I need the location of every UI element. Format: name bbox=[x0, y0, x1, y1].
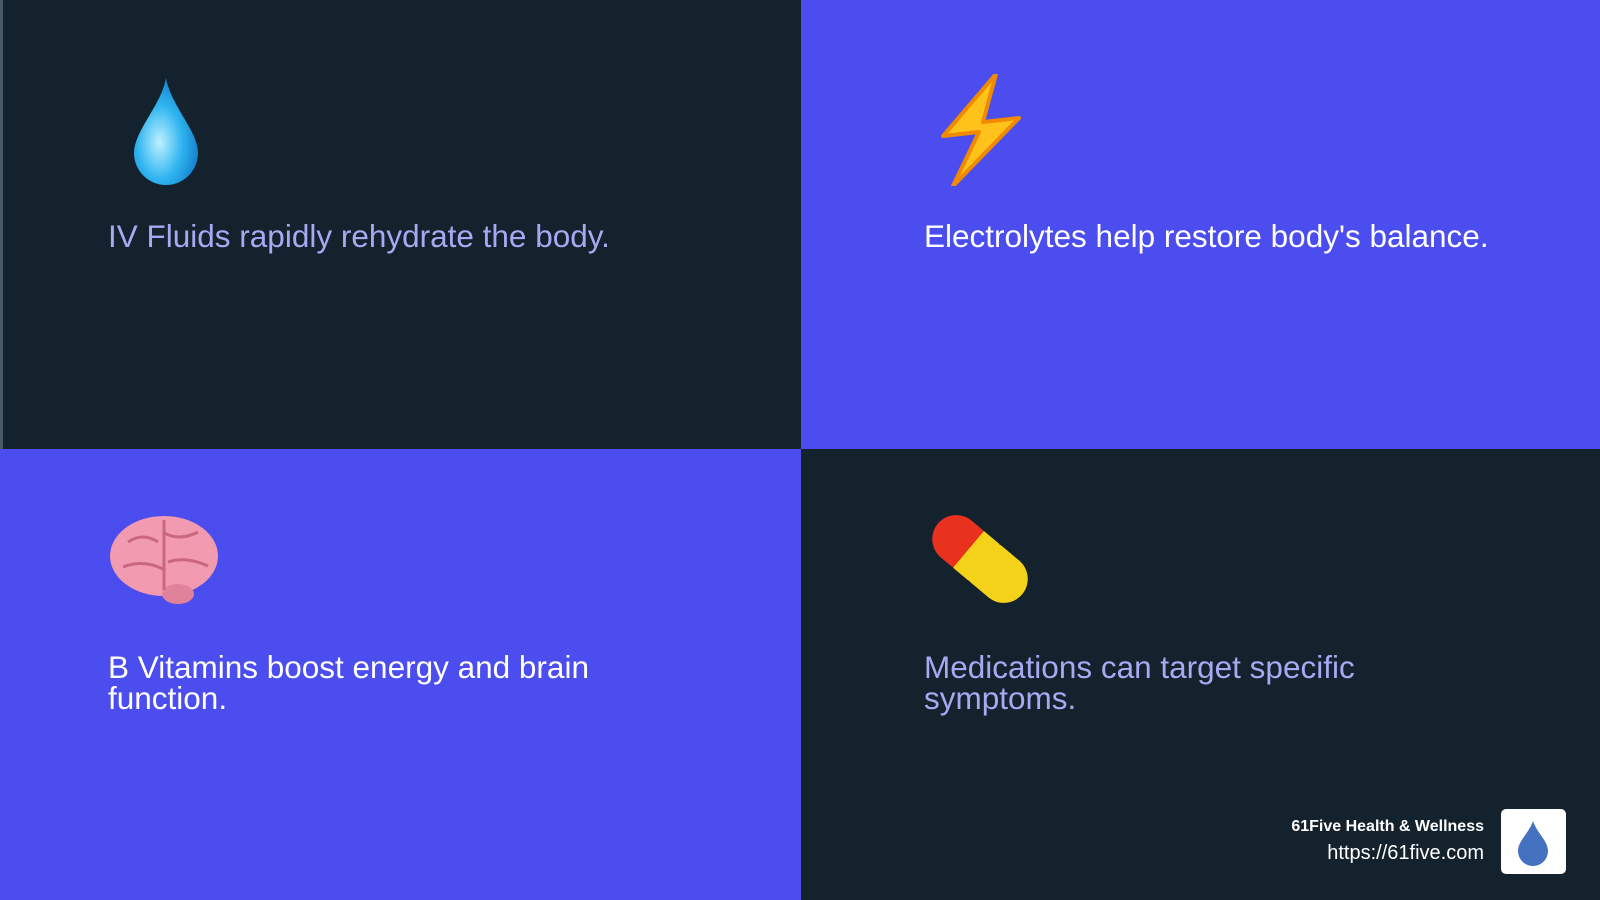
icon: water drop bbox=[134, 78, 198, 185]
panel: medications bbox=[801, 449, 1600, 900]
brand text: 61Five Health & Wellness bbox=[1291, 818, 1484, 835]
text: B vitamins: B Vitamins boost energy and brain function. bbox=[108, 649, 589, 716]
panel: IV fluids bbox=[0, 0, 801, 449]
icon: brain bbox=[110, 516, 218, 604]
text: IV fluids: IV Fluids rapidly rehydrate the body. bbox=[108, 218, 610, 254]
panel: B vitamins bbox=[0, 449, 801, 900]
text: electrolytes: Electrolytes help restore body's balance. bbox=[924, 218, 1489, 254]
icon: pill bbox=[932, 515, 1028, 603]
icon: lightning bbox=[941, 74, 1021, 186]
panel: electrolytes bbox=[801, 0, 1600, 449]
logo bbox=[1501, 809, 1566, 874]
text: medications: Medications can target specific symptoms. bbox=[924, 649, 1355, 716]
brand text bbox=[1291, 818, 1484, 864]
brand text: https://61five.com bbox=[1327, 842, 1484, 864]
